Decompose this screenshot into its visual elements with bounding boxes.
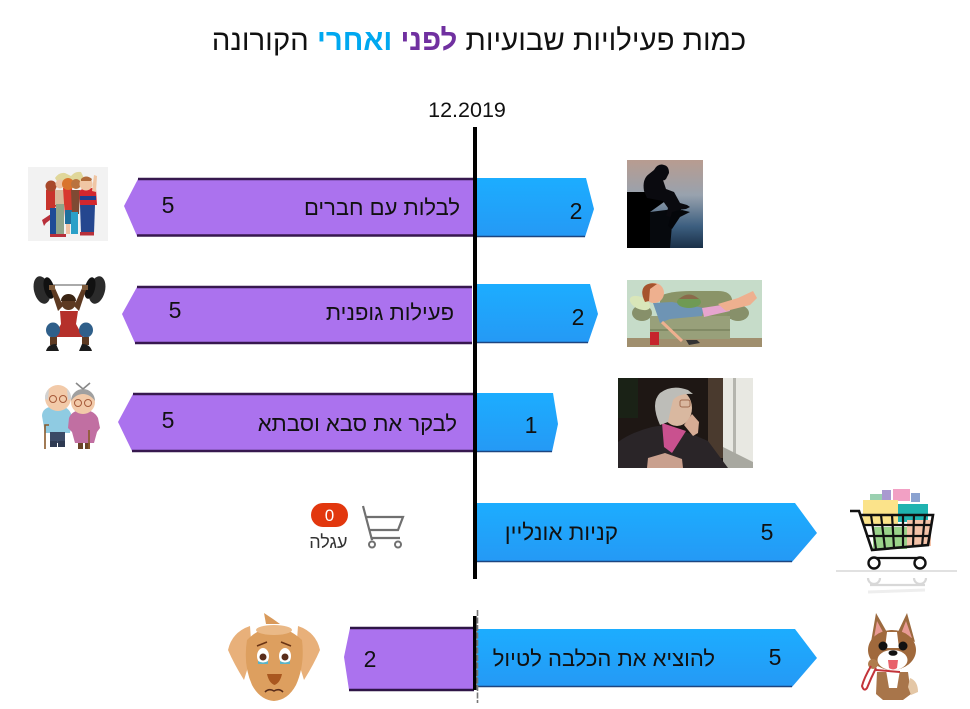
icon: grandparents: [42, 383, 100, 449]
bar: physical activity after: [476, 284, 598, 343]
icon: weightlifter: [31, 274, 108, 351]
bar: online shopping after: 5: [761, 519, 773, 545]
bar: meeting friends before: [124, 179, 473, 236]
badge: zero items: 0: [325, 506, 334, 525]
bar: walking the dog before: [344, 628, 474, 690]
timeline axis: [473, 127, 478, 703]
bar: online shopping after: [476, 503, 817, 562]
icon: happy dog with leash: [862, 613, 918, 700]
bar: walking the dog before: 2: [364, 646, 376, 672]
bar: visiting grandparents before: [118, 394, 473, 451]
bar: physical activity before: [122, 287, 472, 343]
bar: physical activity before: 5: [169, 297, 181, 323]
bar: physical activity after: 2: [572, 304, 584, 330]
bar: walking the dog after: [477, 629, 817, 687]
bar: visiting grandparents before: 5: [162, 407, 174, 433]
icon: group of friends: [28, 167, 108, 241]
bar: meeting friends before: 5: [162, 192, 174, 218]
bar: walking the dog after: 5: [769, 644, 781, 670]
icon: empty shopping cart with badge: [309, 503, 403, 552]
bar: meeting friends before: לבלות עם חברים: [304, 195, 460, 220]
bar: visiting grandparents after: [476, 393, 558, 452]
bar: physical activity before: פעילות גופנית: [326, 300, 454, 325]
bar: visiting grandparents before: לבקר את סבא וסבתא: [258, 411, 457, 436]
icon: full shopping cart: [836, 489, 957, 592]
photo: elderly woman at window: [618, 378, 753, 468]
icon: empty shopping cart with badge: עגלה: [309, 532, 348, 552]
bar: online shopping after: קניות אונליין: [505, 520, 618, 545]
bar: meeting friends after: 2: [570, 198, 582, 224]
bar: visiting grandparents after: 1: [525, 412, 537, 438]
title: כמות פעילויות שבועיות לפני ואחרי הקורונה: [212, 24, 746, 57]
date label: 12.2019: [428, 98, 506, 122]
illustration: man lazing on couch: [627, 280, 762, 347]
photo: sad silhouette: [627, 160, 703, 248]
bar: meeting friends after: [476, 178, 594, 237]
bar: walking the dog after: להוציא את הכלבה לטיול: [493, 646, 715, 671]
icon: crying dog: [228, 613, 320, 701]
